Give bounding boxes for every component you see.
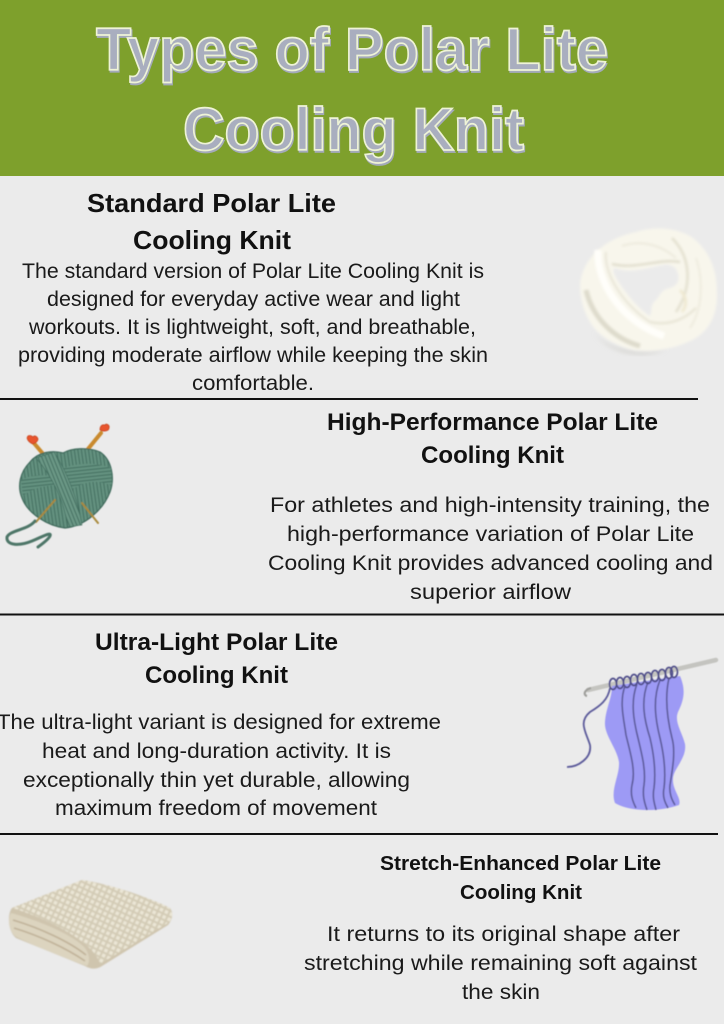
heading: stretch-enhanced knit: Cooling Knit bbox=[460, 882, 582, 904]
text: ultra-light description: heat and long-duration activity. It is bbox=[42, 740, 391, 763]
heading: standard knit: Cooling Knit bbox=[133, 225, 291, 255]
text: stretch-enhanced description bbox=[304, 923, 697, 1004]
text: stretch-enhanced description: It returns to its original shape after bbox=[327, 923, 680, 946]
heading: high-performance knit: High-Performance Polar Lite bbox=[327, 409, 658, 436]
text: high-performance description bbox=[268, 494, 713, 604]
heading: ultra-light knit bbox=[95, 629, 338, 689]
text: standard knit description: designed for everyday active wear and light bbox=[47, 288, 460, 311]
text: high-performance description: Cooling Knit provides advanced cooling and bbox=[268, 552, 713, 575]
heading: ultra-light knit: Cooling Knit bbox=[145, 662, 288, 689]
heading: standard knit bbox=[87, 188, 336, 255]
text: ultra-light description: maximum freedom of movement bbox=[55, 797, 377, 820]
heading: stretch-enhanced knit bbox=[380, 853, 661, 904]
panel: stretch-enhanced knit bbox=[9, 853, 697, 1004]
icon: green yarn heart with needles bbox=[7, 424, 112, 547]
title: Cooling Knit bbox=[183, 96, 524, 163]
heading: stretch-enhanced knit: Stretch-Enhanced Polar Lite bbox=[380, 853, 661, 875]
icon: purple knitting on hook bbox=[567, 660, 716, 810]
text: high-performance description: For athletes and high-intensity training, the bbox=[270, 494, 710, 517]
title: Types of Polar Lite bbox=[96, 16, 608, 83]
panel: ultra-light knit bbox=[0, 629, 716, 820]
header band bbox=[0, 0, 724, 176]
text: stretch-enhanced description: the skin bbox=[462, 981, 540, 1004]
text: standard knit description: comfortable. bbox=[192, 372, 314, 395]
text: high-performance description: superior airflow bbox=[410, 581, 572, 604]
text: ultra-light description: The ultra-light variant is designed for extreme bbox=[0, 711, 441, 734]
panel: standard knit bbox=[18, 188, 717, 395]
divider 3 bbox=[0, 833, 718, 835]
text: ultra-light description: exceptionally thin yet durable, allowing bbox=[23, 769, 410, 792]
icon: folded waffle blanket bbox=[9, 880, 172, 969]
text: stretch-enhanced description: stretching while remaining soft against bbox=[304, 952, 697, 975]
title bbox=[96, 16, 608, 163]
heading: ultra-light knit: Ultra-Light Polar Lite bbox=[95, 629, 338, 656]
heading: standard knit: Standard Polar Lite bbox=[87, 188, 336, 218]
text: high-performance description: high-performance variation of Polar Lite bbox=[287, 523, 694, 546]
text: ultra-light description bbox=[0, 711, 441, 820]
divider 1 bbox=[0, 398, 698, 400]
text: standard knit description: providing moderate airflow while keeping the skin bbox=[18, 344, 488, 367]
text: standard knit description: workouts. It is lightweight, soft, and breathable, bbox=[28, 316, 476, 339]
text: standard knit description bbox=[18, 260, 488, 395]
panel: high-performance knit bbox=[7, 409, 713, 604]
divider 2 bbox=[0, 614, 724, 616]
text: standard knit description: The standard version of Polar Lite Cooling Knit is bbox=[22, 260, 484, 283]
heading: high-performance knit bbox=[327, 409, 658, 469]
icon: white knit scarf bbox=[580, 228, 717, 354]
heading: high-performance knit: Cooling Knit bbox=[421, 442, 564, 469]
